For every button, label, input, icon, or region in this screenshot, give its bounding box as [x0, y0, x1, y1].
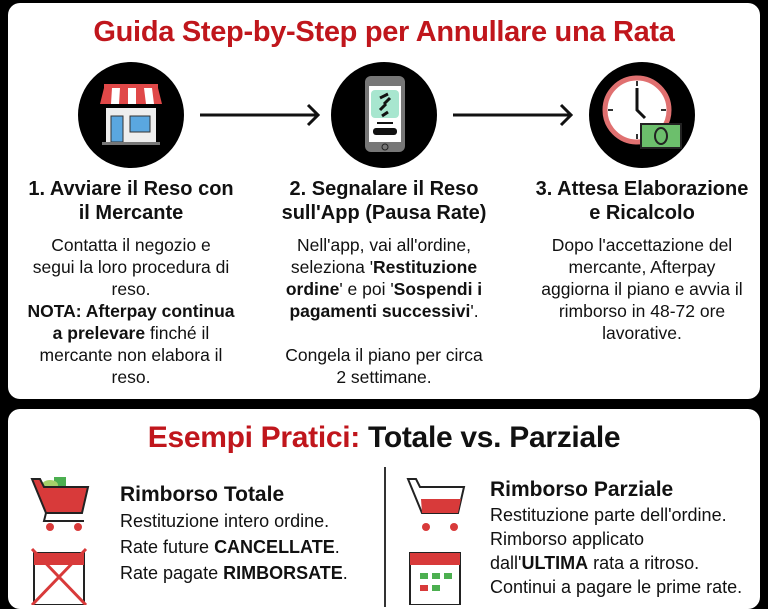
icon: partial cart [406, 478, 466, 531]
step 3 text: aggiorna il piano e avvia il [541, 279, 743, 299]
step 1 text: segui la loro procedura di [33, 257, 229, 277]
example: full refund: Restituzione intero ordine. [120, 511, 329, 531]
icon: clock and money [589, 62, 695, 168]
step 3 text: Dopo l'accettazione del [552, 235, 732, 255]
example: full refund [120, 483, 348, 583]
panel: examples [8, 409, 760, 609]
icon: calendar [409, 552, 461, 605]
step 3 text: rimborso in 48-72 ore [559, 301, 725, 321]
step 1 text [27, 178, 235, 387]
example: partial refund: Rimborso Parziale [490, 478, 673, 501]
step 2 text: 2 settimane. [336, 367, 432, 387]
step 3 text: mercante, Afterpay [569, 257, 715, 277]
step 1 text: il Mercante [79, 202, 183, 224]
example: full refund: Rate pagate RIMBORSATE. [120, 563, 348, 583]
example: full refund: Rate future CANCELLATE. [120, 537, 340, 557]
icon: store [78, 62, 184, 168]
step 1 text: reso. [112, 279, 150, 299]
step 1 text: 1. Avviare il Reso con [28, 178, 234, 200]
step 1 text: mercante non elabora il [40, 345, 222, 365]
step 1 text: NOTA: Afterpay continua [27, 301, 235, 321]
example: partial refund: Restituzione parte dell'ordine. [490, 505, 727, 525]
icon: phone [331, 62, 437, 168]
step 1 text: a prelevare finché il [53, 323, 209, 343]
example: partial refund: Continui a pagare le prime rate. [490, 577, 742, 597]
icon: full cart [30, 477, 90, 531]
step 2 text [282, 178, 486, 387]
step 2 text: ordine' e poi 'Sospendi i [286, 279, 482, 299]
step 2 text: 2. Segnalare il Reso [290, 178, 478, 200]
example: partial refund: Rimborso applicato [490, 529, 644, 549]
step 3 text [536, 178, 748, 343]
step 2 text: seleziona 'Restituzione [291, 257, 477, 277]
section heading: Esempi Pratici: Totale vs. Parziale [148, 421, 620, 454]
step 1 text: reso. [112, 367, 150, 387]
icon: crossed calendar [31, 548, 87, 605]
step 3 text: e Ricalcolo [589, 202, 695, 224]
example: full refund: Rimborso Totale [120, 483, 284, 506]
arrow 2 [453, 104, 573, 126]
step 2 text: sull'App (Pausa Rate) [282, 202, 486, 224]
step 2 text: Nell'app, vai all'ordine, [297, 235, 471, 255]
panel: step guide [8, 3, 760, 399]
arrow 1 [200, 104, 320, 126]
example: partial refund: dall'ULTIMA rata a ritroso. [490, 553, 699, 573]
step 3 text: lavorative. [602, 323, 682, 343]
step 1 text: Contatta il negozio e [51, 235, 211, 255]
step 3 text: 3. Attesa Elaborazione [536, 178, 748, 200]
example: partial refund [490, 478, 742, 597]
step 2 text: pagamenti successivi'. [289, 301, 479, 321]
step 2 text: Congela il piano per circa [285, 345, 483, 365]
divider [384, 467, 386, 607]
title: Guida Step-by-Step per Annullare una Rata [93, 16, 675, 48]
